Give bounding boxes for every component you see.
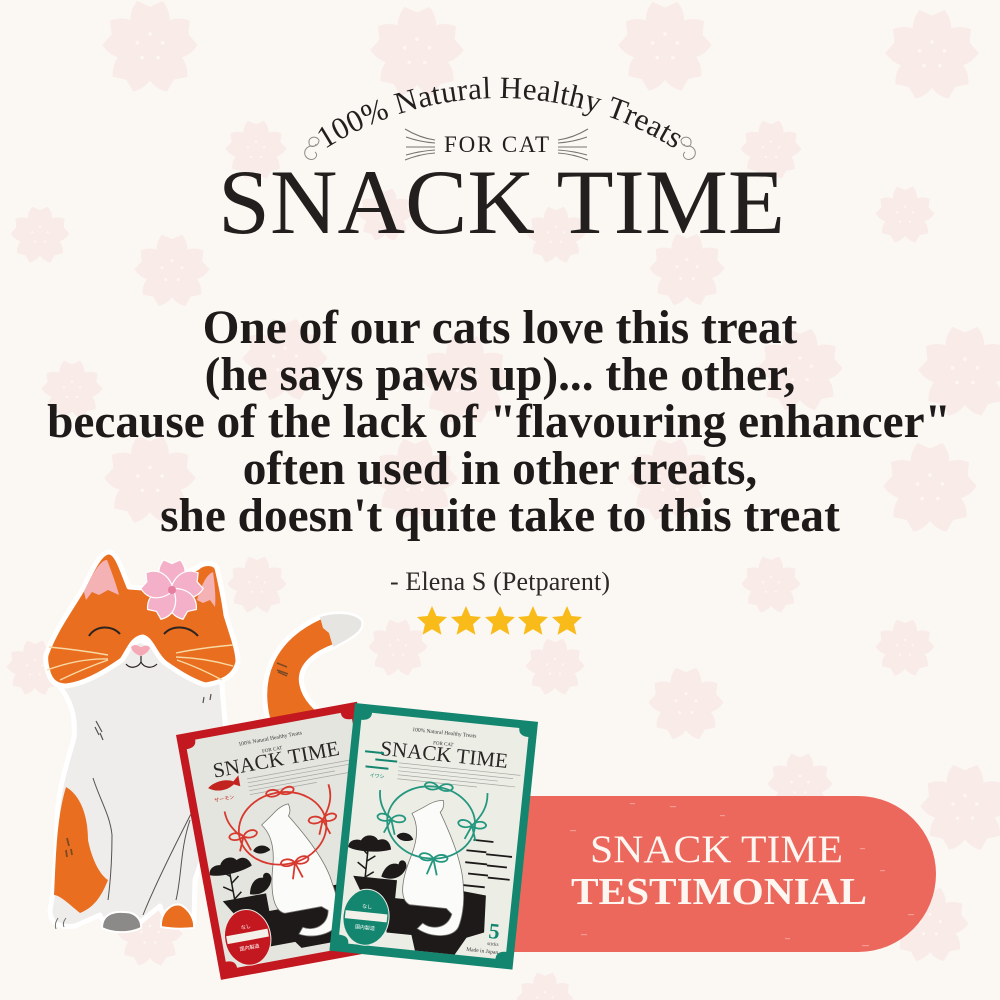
red pack copy lines: [247, 758, 361, 795]
green oval seal: なし: [362, 903, 372, 911]
chest marks: [95, 694, 211, 740]
green pack for cat: FOR CAT: [433, 741, 454, 748]
red oval seal: 国内製造: [239, 942, 260, 953]
nose and mouth: [131, 645, 150, 656]
cat side patch: [54, 787, 108, 913]
clouds: [348, 827, 414, 856]
cat tail: [265, 614, 361, 720]
sticks label: sticks: [487, 942, 499, 948]
red oval seal: [220, 906, 275, 969]
testimonial quote: often used in other treats,: [243, 443, 757, 495]
testimonial quote: [47, 302, 951, 542]
right ear inner: [197, 572, 215, 607]
green pack title: SNACK TIME: [379, 736, 509, 773]
cat flower: [140, 561, 204, 621]
testimonial quote: (he says paws up)... the other,: [205, 349, 795, 401]
made in japan: Made in Japan: [466, 947, 499, 956]
arched tagline: 100% Natural Healthy Treats: [318, 76, 681, 148]
ground: [346, 876, 489, 957]
cat head: [46, 552, 238, 686]
stick count: 5: [488, 918, 501, 944]
plants: [221, 869, 244, 907]
left flourish: [305, 137, 319, 159]
plants: [356, 847, 376, 884]
green pack tagline: 100% Natural Healthy Treats: [412, 727, 477, 740]
attribution: - Elena S (Petparent): [390, 567, 610, 596]
ribbon ring: [222, 779, 346, 889]
banner speckle texture: [570, 803, 914, 946]
red salmon pack: [176, 702, 402, 980]
red oval seal: なし: [240, 923, 251, 931]
ribbon ring: [372, 777, 490, 880]
green sardine pack: [329, 703, 538, 970]
pack cat: [257, 798, 343, 942]
right flourish: [681, 137, 695, 159]
front paw toes: [55, 918, 66, 929]
grey paw: [102, 912, 141, 932]
banner line one: SNACK TIME: [590, 828, 843, 871]
banner shape: [480, 796, 936, 952]
right whiskers: [558, 129, 588, 160]
salmon label: サーモン: [214, 795, 235, 804]
eyes: [89, 627, 198, 636]
green pack copy lines: [397, 763, 520, 791]
call to action banner: [480, 796, 936, 952]
red pack for cat: FOR CAT: [262, 746, 283, 755]
brand title: SNACK TIME: [218, 151, 785, 253]
red pack inner panel: [185, 711, 392, 970]
left whiskers: [405, 129, 435, 160]
five star rating: [417, 606, 582, 635]
green oval seal: 国内製造: [355, 923, 375, 932]
pack cat: [398, 797, 474, 938]
testimonial quote: because of the lack of "flavouring enhancer": [47, 396, 951, 448]
red pack border: [176, 702, 402, 980]
fish: [207, 775, 240, 793]
sardine label: イワシ: [369, 773, 385, 780]
fish group: [364, 751, 398, 770]
orange hind paw: [161, 904, 194, 929]
patch marks: [66, 838, 72, 857]
testimonial quote: One of our cats love this treat: [203, 302, 798, 354]
red pack title: SNACK TIME: [211, 736, 341, 783]
ground: [223, 872, 391, 960]
green oval seal: [340, 887, 392, 947]
leg lines: [93, 778, 193, 915]
cat body: [50, 640, 226, 928]
green pack border: [329, 703, 538, 970]
clouds: [206, 844, 273, 878]
sardine school: [463, 839, 513, 890]
cat illustration: [46, 552, 361, 932]
logo header: [218, 76, 785, 253]
banner line two: TESTIMONIAL: [571, 871, 867, 913]
red pack tagline: 100% Natural Healthy Treats: [238, 730, 302, 748]
whiskers: [47, 645, 233, 680]
green pack inner panel: [338, 712, 529, 960]
for cat label: FOR CAT: [444, 132, 549, 157]
testimonial quote: she doesn't quite take to this treat: [160, 490, 840, 542]
left ear inner: [84, 560, 119, 600]
